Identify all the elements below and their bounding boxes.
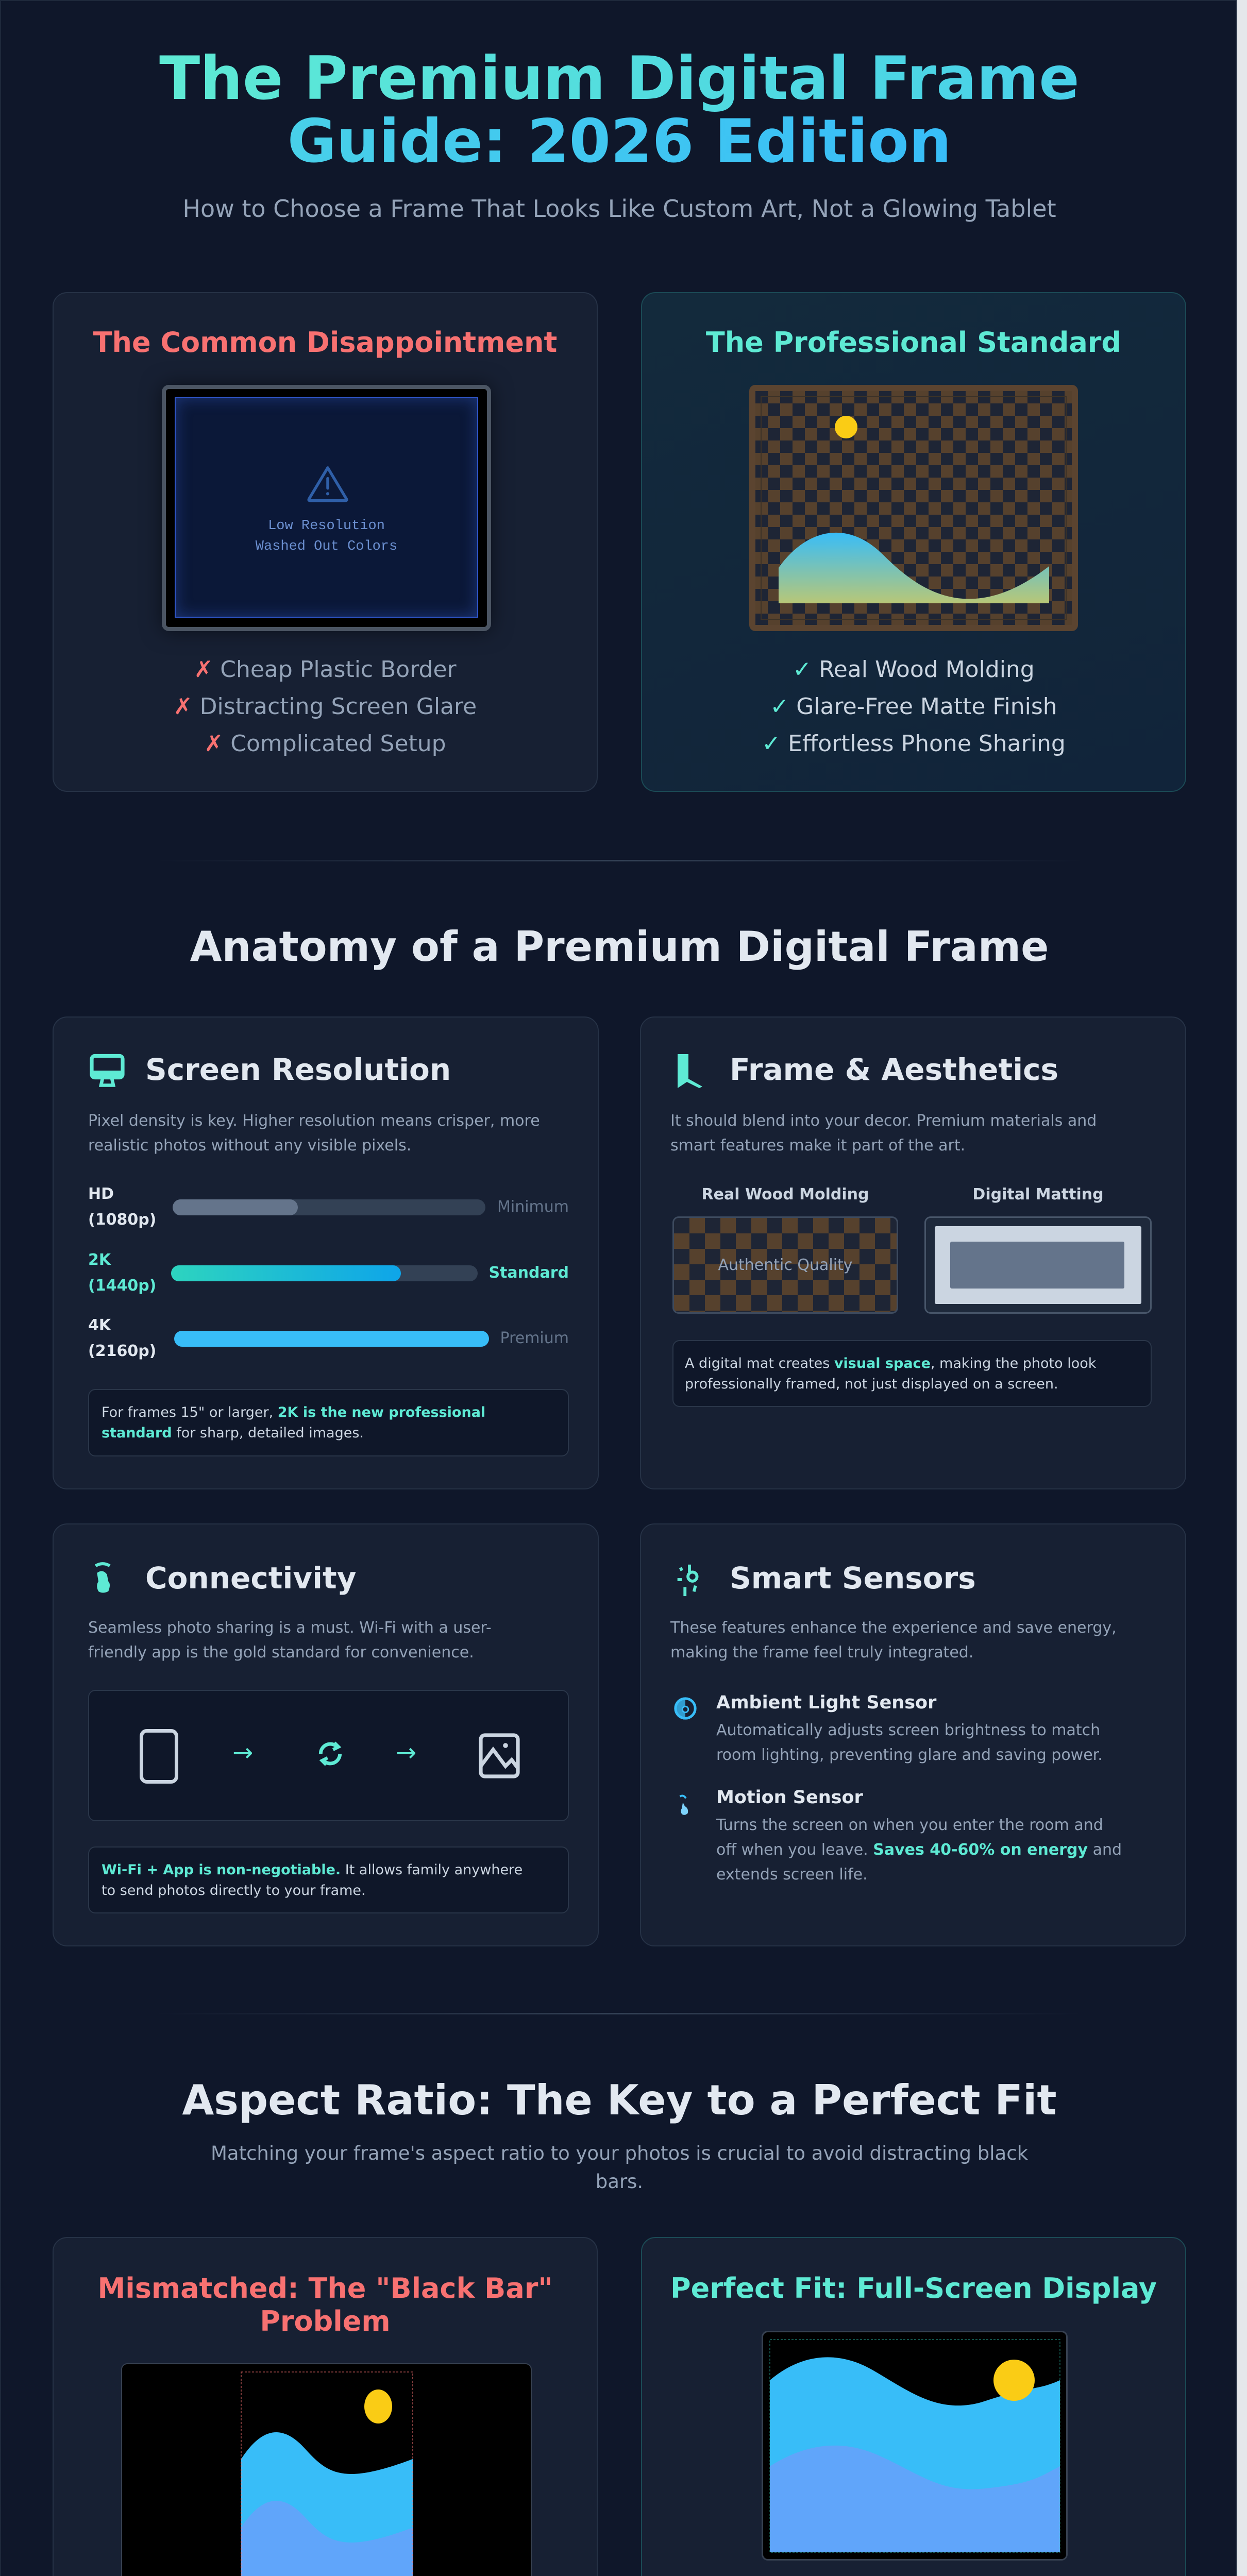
- icon: wifi hand: [95, 1562, 110, 1593]
- text: description: [88, 1112, 540, 1155]
- diagram: phone to frame: [88, 1690, 569, 1821]
- title: The Premium Digital Frame: [159, 44, 1080, 113]
- chart: resolution bars: Minimum: [497, 1198, 569, 1216]
- text: motion description: [716, 1816, 1122, 1884]
- item: motion sensor: [679, 1787, 1122, 1884]
- panel: connectivity: [53, 1523, 599, 1946]
- text: description: These features enhance the experience and save energy,: [670, 1619, 1117, 1637]
- heading: mismatched: Mismatched: The "Black Bar": [97, 2272, 553, 2304]
- text: ambient description: [716, 1721, 1103, 1764]
- text: low resolution: Low Resolution: [268, 518, 385, 534]
- heading: screen resolution: Screen Resolution: [145, 1052, 451, 1087]
- icon: bookmark: [678, 1054, 702, 1088]
- chart: resolution bars: 2K: [88, 1251, 111, 1269]
- text: aspect subtitle: Matching your frame's aspect ratio to your photos is crucial to avoid distracting black: [211, 2142, 1028, 2164]
- text: motion description: extends screen life.: [716, 1866, 868, 1884]
- item: ambient light sensor: [674, 1692, 1103, 1764]
- list: benefits: ✓ Effortless Phone Sharing: [762, 731, 1066, 757]
- callout: wifi non-negotiable: to send photos directly to your frame.: [102, 1883, 366, 1899]
- heading: mismatched: [97, 2272, 553, 2337]
- subtitle: How to Choose a Frame That Looks Like Custom Art, Not a Glowing Tablet: [182, 195, 1056, 223]
- icon: sensor: [677, 1564, 699, 1596]
- text: description: Pixel density is key. Higher resolution means crisper, more: [88, 1112, 540, 1130]
- text: description: [670, 1619, 1117, 1662]
- swatch: digital mat: [924, 1216, 1152, 1314]
- panel: perfect fit: [641, 2237, 1186, 2576]
- callout: visual space: A digital mat creates visual space, making the photo look: [685, 1355, 1096, 1371]
- heading: professional standard: The Professional Standard: [706, 326, 1121, 359]
- icon: motion hand: [679, 1795, 688, 1815]
- list: benefits: [762, 656, 1066, 757]
- text: description: It should blend into your decor. Premium materials and: [670, 1112, 1097, 1130]
- callout: 2K standard: For frames 15" or larger, 2K is the new professional: [102, 1404, 485, 1420]
- icon: warning: [307, 466, 348, 502]
- heading: frame aesthetics: Frame & Aesthetics: [730, 1052, 1058, 1087]
- list: drawbacks: ✗ Complicated Setup: [204, 731, 446, 757]
- list: benefits: ✓ Glare-Free Matte Finish: [770, 693, 1057, 720]
- heading: perfect fit: Perfect Fit: Full-Screen Display: [670, 2272, 1157, 2304]
- text: motion description: off when you leave. Saves 40-60% on energy and: [716, 1841, 1122, 1859]
- callout: 2K standard: standard for sharp, detailed images.: [102, 1425, 364, 1441]
- text: description: smart features make it part of the art.: [670, 1137, 965, 1155]
- title: motion sensor: Motion Sensor: [716, 1787, 863, 1808]
- heading: common disappointment: The Common Disappointment: [93, 326, 557, 359]
- heading: aspect ratio: Aspect Ratio: The Key to a Perfect Fit: [182, 2076, 1057, 2124]
- panel: professional standard: [641, 292, 1186, 792]
- text: aspect subtitle: [211, 2142, 1028, 2193]
- text: motion description: Turns the screen on when you enter the room and: [716, 1816, 1103, 1834]
- callout: visual space: professionally framed, not just displayed on a screen.: [685, 1376, 1058, 1392]
- swatch: wood: Authentic Quality: [718, 1256, 853, 1274]
- title: Guide: 2026 Edition: [288, 107, 951, 176]
- panel: frame aesthetics: [640, 1016, 1186, 1489]
- heading: connectivity: Connectivity: [145, 1561, 357, 1596]
- frame mockup: wood frame: [749, 385, 1078, 631]
- chart: resolution bars: (1080p): [88, 1211, 156, 1229]
- chart: resolution bars: (1440p): [88, 1277, 156, 1295]
- list: drawbacks: ✗ Distracting Screen Glare: [174, 693, 477, 720]
- icon: sync: [318, 1741, 342, 1766]
- panel: mismatched: [53, 2237, 598, 2576]
- panel: common disappointment: [53, 292, 598, 792]
- text: description: Seamless photo sharing is a must. Wi-Fi with a user-: [88, 1619, 492, 1637]
- text: description: realistic photos without any visible pixels.: [88, 1137, 411, 1155]
- title: [159, 44, 1080, 176]
- chart: resolution bars: [88, 1185, 569, 1360]
- text: description: making the frame feel truly integrated.: [670, 1643, 973, 1662]
- icon: picture frame: [479, 1733, 520, 1778]
- text: low resolution: Washed Out Colors: [256, 539, 397, 554]
- screen: 4:3 full: [762, 2331, 1068, 2561]
- chart: resolution bars: Standard: [488, 1264, 569, 1282]
- text: description: [670, 1112, 1097, 1155]
- arrow: →: [232, 1738, 253, 1767]
- text: aspect subtitle: bars.: [596, 2171, 643, 2193]
- chart: resolution bars: (2160p): [88, 1342, 156, 1360]
- arrow: →: [396, 1738, 416, 1767]
- icon: phone: [140, 1729, 178, 1784]
- screen mockup: cheap tablet: [162, 385, 491, 631]
- icon: monitor: [90, 1054, 125, 1087]
- heading: smart sensors: Smart Sensors: [730, 1561, 976, 1596]
- callout: wifi non-negotiable: [88, 1846, 569, 1913]
- title: ambient light sensor: Ambient Light Sensor: [716, 1692, 936, 1713]
- heading: anatomy: Anatomy of a Premium Digital Frame: [190, 923, 1049, 971]
- chart: resolution bars: Premium: [500, 1329, 569, 1347]
- callout: wifi non-negotiable: Wi-Fi + App is non-negotiable. It allows family anywhere: [102, 1862, 523, 1878]
- swatch: wood: [672, 1216, 898, 1314]
- text: low resolution: [256, 518, 397, 554]
- list: drawbacks: ✗ Cheap Plastic Border: [194, 656, 457, 683]
- panel: screen resolution: [53, 1016, 599, 1489]
- chart: resolution bars: HD: [88, 1185, 114, 1203]
- panel: smart sensors: [640, 1523, 1186, 1946]
- screen: 16:9 with black bars: [121, 2363, 532, 2576]
- callout: 2K standard: [88, 1389, 569, 1456]
- label: real wood molding: Real Wood Molding: [702, 1185, 869, 1204]
- icon: ambient light: [674, 1697, 697, 1720]
- chart: resolution bars: 4K: [88, 1316, 111, 1334]
- text: description: [88, 1619, 492, 1662]
- text: description: friendly app is the gold standard for convenience.: [88, 1643, 474, 1662]
- list: benefits: ✓ Real Wood Molding: [793, 656, 1035, 683]
- label: digital matting: Digital Matting: [972, 1185, 1104, 1204]
- text: ambient description: room lighting, preventing glare and saving power.: [716, 1746, 1103, 1764]
- text: ambient description: Automatically adjusts screen brightness to match: [716, 1721, 1100, 1739]
- callout: visual space: [672, 1340, 1152, 1407]
- list: drawbacks: [174, 656, 477, 757]
- heading: mismatched: Problem: [260, 2305, 391, 2337]
